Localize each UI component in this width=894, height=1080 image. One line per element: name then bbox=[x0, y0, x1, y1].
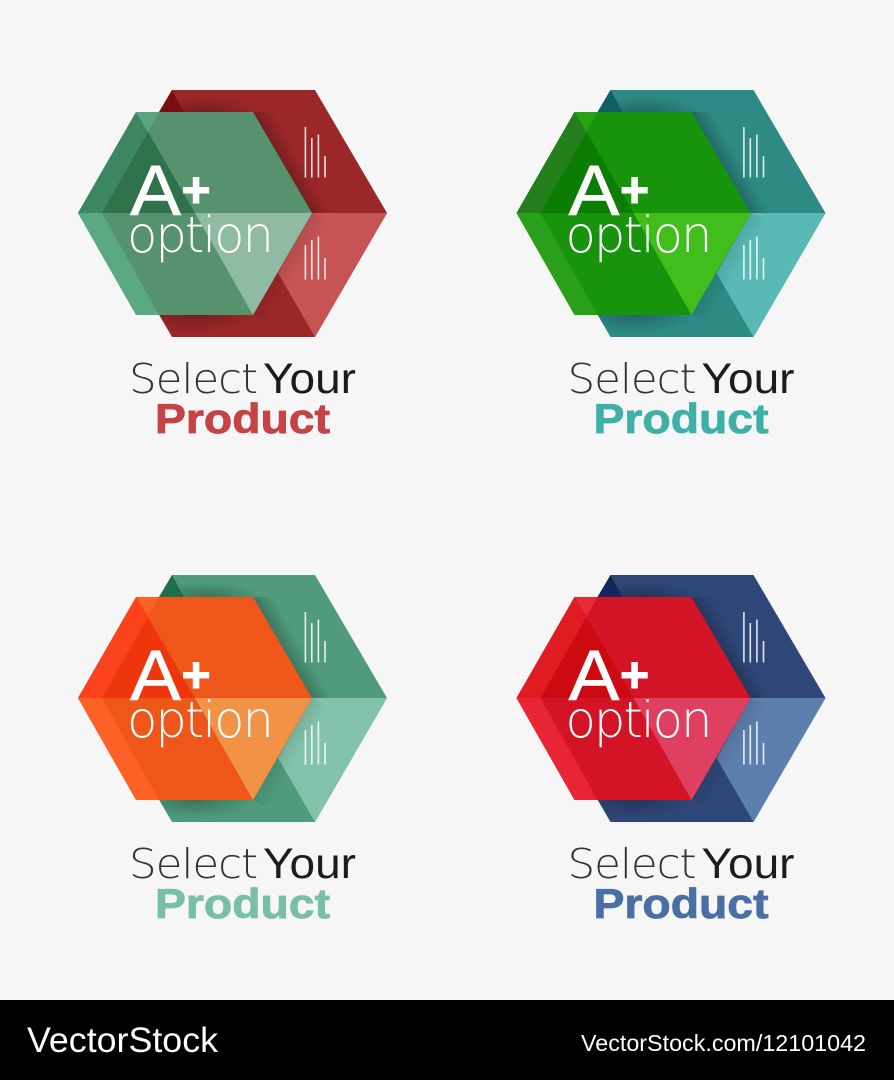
card: green and orange hexagon bbox=[78, 575, 387, 927]
label: option: option bbox=[127, 691, 272, 749]
heading: Select Your Product bbox=[129, 355, 356, 442]
bar icon: upper bbox=[305, 127, 326, 178]
bar icon: lower bbox=[305, 722, 326, 764]
heading: Select Your Product bbox=[568, 840, 794, 927]
bar icon: lower bbox=[743, 236, 764, 280]
badge: A+ bbox=[568, 152, 649, 231]
badge: A+ bbox=[130, 152, 211, 231]
heading: Select Your Product: Your bbox=[702, 840, 794, 888]
heading: Select Your Product: Select bbox=[568, 840, 696, 888]
bar icon: lower bbox=[743, 722, 764, 764]
heading: Select Your Product: Select bbox=[129, 840, 257, 888]
heading: Select Your Product: Product bbox=[594, 395, 769, 442]
back hexagon bbox=[100, 90, 387, 337]
card: red and green hexagon bbox=[78, 90, 387, 442]
heading: Select Your Product: Product bbox=[155, 395, 330, 442]
footer bar bbox=[0, 1000, 894, 1080]
badge: A+: A bbox=[130, 637, 182, 716]
badge: A+: + bbox=[182, 162, 211, 218]
front hexagon bbox=[78, 597, 312, 800]
back hexagon bbox=[538, 90, 826, 337]
heading: Select Your Product bbox=[129, 840, 356, 927]
badge: A+: A bbox=[568, 152, 620, 231]
heading: Select Your Product: Your bbox=[263, 355, 356, 403]
bar icon: upper bbox=[305, 612, 326, 662]
footer id: VectorStock.com/12101042: VectorStock.com/12101042 bbox=[581, 1030, 866, 1056]
heading: Select Your Product: Select bbox=[568, 355, 696, 403]
heading: Select Your Product: Select bbox=[129, 355, 257, 403]
badge: A+: + bbox=[620, 647, 649, 703]
label: option: option bbox=[566, 206, 710, 264]
badge: A+: A bbox=[130, 152, 182, 231]
heading: Select Your Product bbox=[568, 355, 794, 442]
label: option: option bbox=[566, 691, 710, 749]
badge: A+: A bbox=[568, 637, 620, 716]
front hexagon bbox=[516, 112, 750, 315]
footer logo: VectorStock: VectorStock bbox=[27, 1020, 218, 1060]
bar icon: lower bbox=[305, 236, 326, 280]
front hexagon bbox=[78, 112, 312, 315]
badge: A+: + bbox=[182, 647, 211, 703]
bar icon: upper bbox=[743, 127, 764, 178]
label: option: option bbox=[127, 206, 272, 264]
badge: A+: + bbox=[620, 162, 649, 218]
back hexagon bbox=[100, 575, 387, 822]
heading: Select Your Product: Your bbox=[263, 840, 356, 888]
badge: A+ bbox=[568, 637, 649, 716]
badge: A+ bbox=[130, 637, 211, 716]
bar icon: upper bbox=[743, 612, 764, 662]
back hexagon bbox=[538, 575, 826, 822]
heading: Select Your Product: Product bbox=[594, 880, 769, 927]
card: teal and green hexagon bbox=[516, 90, 826, 442]
heading: Select Your Product: Your bbox=[702, 355, 794, 403]
front hexagon bbox=[516, 597, 750, 800]
heading: Select Your Product: Product bbox=[155, 880, 330, 927]
card: navy and red hexagon bbox=[516, 575, 826, 927]
